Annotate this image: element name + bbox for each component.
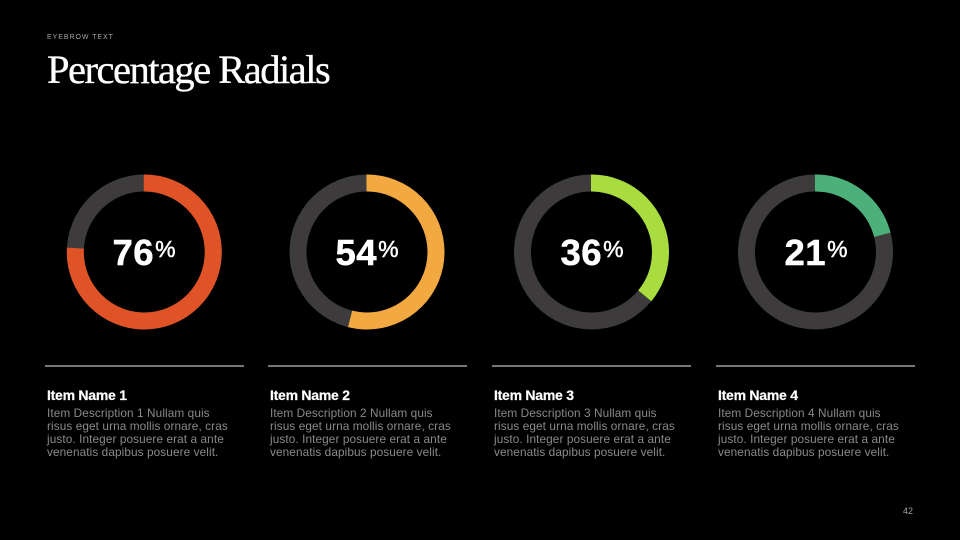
description 4 <box>718 406 899 459</box>
radial 21% <box>746 183 884 321</box>
radial 76% <box>75 183 213 321</box>
description 2: venenatis dapibus posuere velit. <box>270 445 441 459</box>
description 1: risus eget urna mollis ornare, cras <box>47 419 228 433</box>
column 2 <box>268 365 467 459</box>
value 36%: 36% <box>560 232 624 272</box>
description 4: venenatis dapibus posuere velit. <box>718 445 889 459</box>
description 4: Item Description 4 Nullam quis <box>718 406 881 420</box>
description 3: justo. Integer posuere erat a ante <box>494 432 671 446</box>
item name 3: Item Name 3 <box>494 387 574 403</box>
column 1 <box>45 365 244 459</box>
description 1: justo. Integer posuere erat a ante <box>47 432 224 446</box>
description 3: Item Description 3 Nullam quis <box>494 406 657 420</box>
radial 36% <box>522 183 660 321</box>
radial 54% <box>298 183 436 321</box>
description 1: Item Description 1 Nullam quis <box>47 406 210 420</box>
description 1 <box>46 406 228 459</box>
item name 4: Item Name 4 <box>718 387 798 403</box>
item name 1: Item Name 1 <box>47 387 127 403</box>
column 4 <box>716 365 915 459</box>
item name 2: Item Name 2 <box>270 387 350 403</box>
description 3 <box>494 406 675 459</box>
title: Percentage Radials <box>47 47 329 92</box>
description 2 <box>270 406 451 459</box>
description 2: justo. Integer posuere erat a ante <box>270 432 447 446</box>
description 3: venenatis dapibus posuere velit. <box>494 445 665 459</box>
eyebrow: EYEBROW TEXT <box>47 34 114 40</box>
description 2: Item Description 2 Nullam quis <box>270 406 433 420</box>
value 21%: 21% <box>784 232 848 272</box>
value 54%: 54% <box>335 232 399 272</box>
column 3 <box>492 365 691 459</box>
value 76%: 76% <box>112 232 176 272</box>
page number: 42 <box>903 506 913 516</box>
description 4: justo. Integer posuere erat a ante <box>718 432 895 446</box>
description 4: risus eget urna mollis ornare, cras <box>718 419 899 433</box>
description 1: venenatis dapibus posuere velit. <box>47 445 218 459</box>
description 3: risus eget urna mollis ornare, cras <box>494 419 675 433</box>
description 2: risus eget urna mollis ornare, cras <box>270 419 451 433</box>
